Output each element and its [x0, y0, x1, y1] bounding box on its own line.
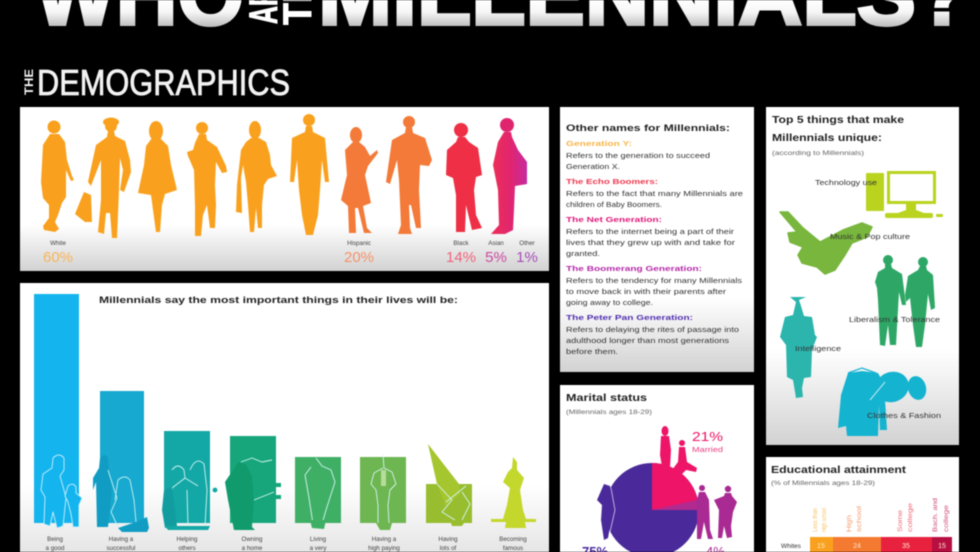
black silhouette	[446, 123, 482, 232]
panel: ethnicity demographics	[20, 107, 549, 271]
ethnicity labels: White	[50, 240, 66, 247]
panel heading: Marital status	[566, 392, 647, 404]
stacked bar: whites: 35	[902, 543, 910, 550]
ethnicity labels: 14%	[446, 249, 476, 266]
rotated column labels: college	[943, 504, 950, 532]
ethnicity labels: 1%	[516, 249, 538, 266]
asian silhouette	[491, 118, 527, 234]
icon labels: Technology use	[815, 178, 877, 187]
rotated column labels: school	[856, 506, 863, 532]
pie chart	[605, 463, 699, 552]
ethnicity labels: 60%	[43, 249, 73, 266]
peter pan generation: The Peter Pan Generation:	[566, 313, 693, 322]
bar labels: Becoming	[499, 536, 527, 543]
echo boomers: Refers to the fact that many Millennials are	[566, 190, 743, 198]
bar labels: others	[178, 545, 196, 552]
bar labels: a very	[310, 545, 327, 552]
bar: owning a home	[225, 436, 281, 530]
panel: top 5 things	[766, 107, 959, 445]
rotated column labels: Bach. and	[932, 497, 939, 532]
bar: living a very religious life	[295, 457, 341, 529]
stacked bar: whites: 24	[853, 543, 861, 550]
rotated column labels: High school	[821, 508, 828, 532]
ethnicity labels	[43, 240, 538, 266]
bar labels: Being	[47, 536, 63, 543]
peter pan generation: Refers to delaying the rites of passage into	[566, 326, 739, 334]
panel: educational attainment	[766, 457, 959, 552]
section heading: THE	[22, 69, 36, 95]
net generation: granted.	[566, 250, 600, 258]
panel heading: Other names for Millennials:	[566, 123, 730, 133]
ethnicity labels: 5%	[485, 249, 507, 266]
bar: being a good parent	[34, 294, 82, 528]
panel heading: Top 5 things that make	[772, 115, 904, 126]
bar: having a successful marriage	[93, 391, 149, 532]
generation y: Generation Y:	[566, 139, 632, 148]
echo boomers	[566, 177, 743, 209]
panel subtitle: (% of Millennials ages 18-29)	[771, 480, 875, 487]
section heading: DEMOGRAPHICS	[37, 62, 290, 103]
boomerang generation: Refers to the tendency for many Millennials	[566, 277, 743, 285]
panel heading: Millennials unique:	[772, 133, 882, 144]
icon labels: Liberalism & Tolerance	[849, 315, 940, 324]
icon labels: Intelligence	[795, 344, 841, 353]
white silhouettes	[41, 114, 329, 238]
bar labels: a good	[46, 545, 65, 552]
ethnicity labels: 20%	[344, 249, 374, 266]
figure: single	[597, 484, 613, 540]
boomerang generation	[566, 264, 743, 307]
peter pan generation: before them.	[566, 348, 618, 356]
net generation: Refers to the internet being a part of their	[566, 228, 735, 236]
bar labels: famous	[503, 545, 523, 552]
bar labels: high paying	[368, 545, 400, 552]
bar labels: a home	[242, 545, 263, 552]
bar labels: Having a	[109, 536, 134, 543]
bar labels	[46, 536, 527, 552]
icon: clothes	[838, 367, 929, 436]
bar labels: Owning	[242, 536, 263, 543]
hispanic silhouettes	[341, 116, 432, 234]
peter pan generation	[566, 313, 739, 356]
bar: having lots of free time	[426, 444, 472, 526]
panel heading: (according to Millennials)	[772, 150, 864, 157]
bar labels: Helping	[177, 536, 198, 543]
pie labels: Married	[692, 447, 723, 454]
title	[35, 0, 970, 44]
net generation: The Net Generation:	[566, 215, 662, 224]
ethnicity labels: Asian	[488, 240, 504, 247]
ethnicity labels: Other	[519, 240, 535, 247]
bar: having a high paying career	[360, 455, 406, 530]
bar labels: lots of	[440, 545, 457, 552]
panel heading	[772, 115, 904, 157]
echo boomers: children of Baby Boomers.	[566, 201, 662, 209]
bar labels: successful	[107, 545, 135, 552]
icon labels: Music & Pop culture	[830, 232, 910, 241]
panel heading: Educational attainment	[771, 464, 907, 476]
net generation	[566, 215, 736, 258]
figure: becoming famous	[491, 457, 536, 528]
rotated column labels: High	[846, 514, 853, 532]
figures: divorced	[697, 485, 737, 539]
rotated column labels: college	[907, 502, 914, 532]
panel: important things bar chart	[20, 283, 549, 552]
row label: Whites	[781, 543, 802, 550]
rotated column labels: Some	[897, 509, 904, 532]
bar labels: Having	[438, 536, 458, 543]
generation y: Generation X.	[566, 163, 620, 171]
generation y	[566, 139, 710, 171]
net generation: lives that they grew up with and take for	[566, 239, 736, 247]
boomerang generation: to move back in with their parents after	[566, 288, 727, 296]
pie labels	[582, 429, 725, 552]
icon: music guitar	[780, 212, 872, 274]
icon: graduate	[780, 297, 817, 398]
chart heading: Millennials say the most important things in their lives will be:	[99, 295, 458, 305]
pie labels: 21%	[692, 429, 724, 444]
panel: other names	[560, 107, 754, 372]
ethnicity labels: Black	[453, 240, 469, 247]
generation y: Refers to the generation to succeed	[566, 152, 710, 160]
icon: two men	[875, 255, 935, 347]
icon labels	[795, 178, 941, 420]
boomerang generation: going away to college.	[566, 299, 653, 307]
rotated column labels: Less than	[812, 508, 819, 532]
echo boomers: The Echo Boomers:	[566, 177, 658, 186]
ethnicity labels: Hispanic	[347, 240, 371, 247]
bar: helping others in need	[162, 431, 217, 530]
bar labels: Having a	[372, 536, 397, 543]
panel subtitle: (Millennials ages 18-29)	[566, 409, 652, 416]
stacked bar: whites: 15	[817, 543, 825, 550]
figure: married couple	[660, 426, 697, 480]
bar labels: Living	[310, 536, 327, 543]
rotated column labels	[812, 497, 950, 532]
stacked bar: whites	[810, 537, 952, 552]
boomerang generation: The Boomerang Generation:	[566, 264, 702, 273]
icon labels: Clothes & Fashion	[867, 411, 941, 420]
icon: computer	[866, 172, 943, 218]
peter pan generation: adulthood longer than most generations	[566, 337, 730, 345]
panel: marital status	[560, 385, 754, 552]
stacked bar: whites: 15	[938, 543, 946, 550]
